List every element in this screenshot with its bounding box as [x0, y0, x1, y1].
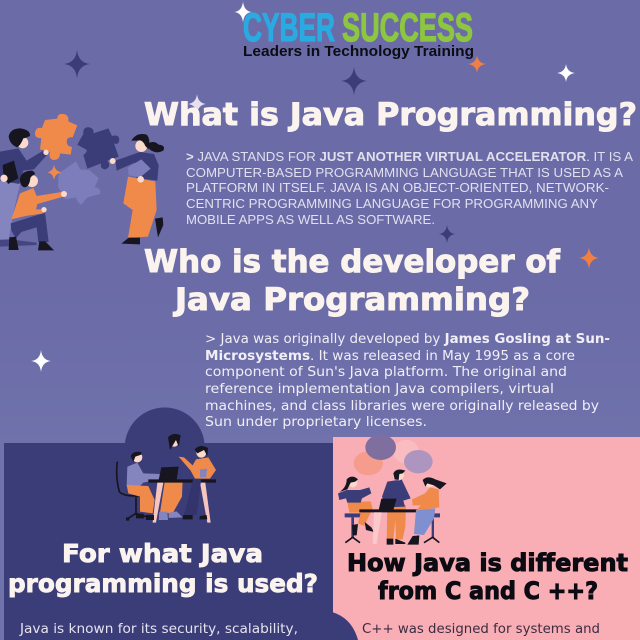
woman with puzzle piece: [110, 134, 164, 244]
panel heading: [8, 539, 318, 598]
heading: what is java: What is Java Programming?: [144, 97, 637, 133]
text block: java developer: Microsystems . It was released in May 1995 as a core: [205, 349, 575, 364]
panel heading: For what Java: [62, 539, 263, 568]
text block: java developer: component of Sun's Java platform. The original and: [205, 365, 567, 380]
right woman: [407, 477, 447, 545]
logo: [243, 6, 474, 60]
corner circle: [332, 612, 358, 640]
decorative stars: [31, 2, 599, 372]
navy puzzle piece: [77, 127, 119, 169]
text block: java definition: > JAVA STANDS FOR JUST ANOTHER VIRTUAL ACCELERATOR . IT IS A: [186, 149, 633, 164]
panel background: [333, 437, 640, 640]
chair: [117, 462, 148, 519]
panel heading: from C and C ++?: [378, 577, 598, 605]
panel background with dome: [4, 407, 334, 640]
laptop: [379, 499, 397, 510]
text block: java developer: [205, 332, 610, 430]
panel: java uses: [4, 407, 334, 640]
text block: java definition: PLATFORM IN ITSELF. JAVA IS AN OBJECT-ORIENTED, NETWORK-: [186, 180, 609, 195]
text block: java definition: COMPUTER-BASED PROGRAMMING LANGUAGE THAT IS USED AS A: [186, 165, 623, 180]
text block: java definition: [186, 149, 633, 227]
stools: [345, 513, 440, 517]
orange sparkle: [47, 165, 62, 180]
heading: who is the developer: Who is the developer of: [144, 244, 561, 280]
light puzzle piece: [58, 161, 100, 205]
standing woman: [160, 480, 183, 513]
shoes: [126, 513, 207, 521]
text block: java definition: MOBILE APPS AS WELL AS SOFTWARE.: [186, 212, 435, 227]
logo word: cyber: CYBER: [243, 6, 335, 50]
middle man: [382, 469, 411, 545]
text block: java definition: CENTRIC PROGRAMMING LANGUAGE FOR PROGRAMMING ANY: [186, 196, 598, 211]
text block: java developer: reference implementation Java compilers, virtual: [205, 382, 554, 397]
illustration: discussion at table: [338, 435, 447, 545]
panel heading: [347, 549, 628, 605]
laptop: [159, 467, 179, 480]
logo tagline: Leaders in Technology Training: [243, 43, 474, 60]
panel heading: How Java is different: [347, 549, 628, 577]
illustration: team with puzzle pieces: [0, 114, 164, 250]
illustration: team at desk: [117, 434, 216, 523]
heading: who is the developer: Java Programming?: [173, 282, 530, 318]
seated man: [127, 463, 160, 486]
text block: java developer: machines, and class libraries were originally released by: [205, 399, 599, 414]
left woman: [338, 477, 374, 535]
man kneeling: [0, 171, 67, 250]
speech bubbles: [354, 451, 383, 475]
text block: java developer: > Java was originally developed by James Gosling at Sun-: [205, 332, 610, 347]
man standing: [0, 128, 49, 239]
panel heading: programming is used?: [8, 569, 318, 598]
panel: java vs c and c++: [332, 435, 640, 640]
panel text: Java is known for its security, scalability,: [19, 622, 298, 637]
woman with tablet: [184, 478, 201, 515]
text block: java developer: Sun under proprietary licenses.: [205, 415, 427, 430]
orange puzzle piece: [35, 114, 77, 160]
heading: who is the developer: [144, 244, 561, 318]
desk: [148, 479, 216, 483]
panel text: C++ was designed for systems and: [362, 622, 600, 637]
logo word: success: SUCCESS: [342, 6, 473, 50]
table: [359, 509, 419, 512]
